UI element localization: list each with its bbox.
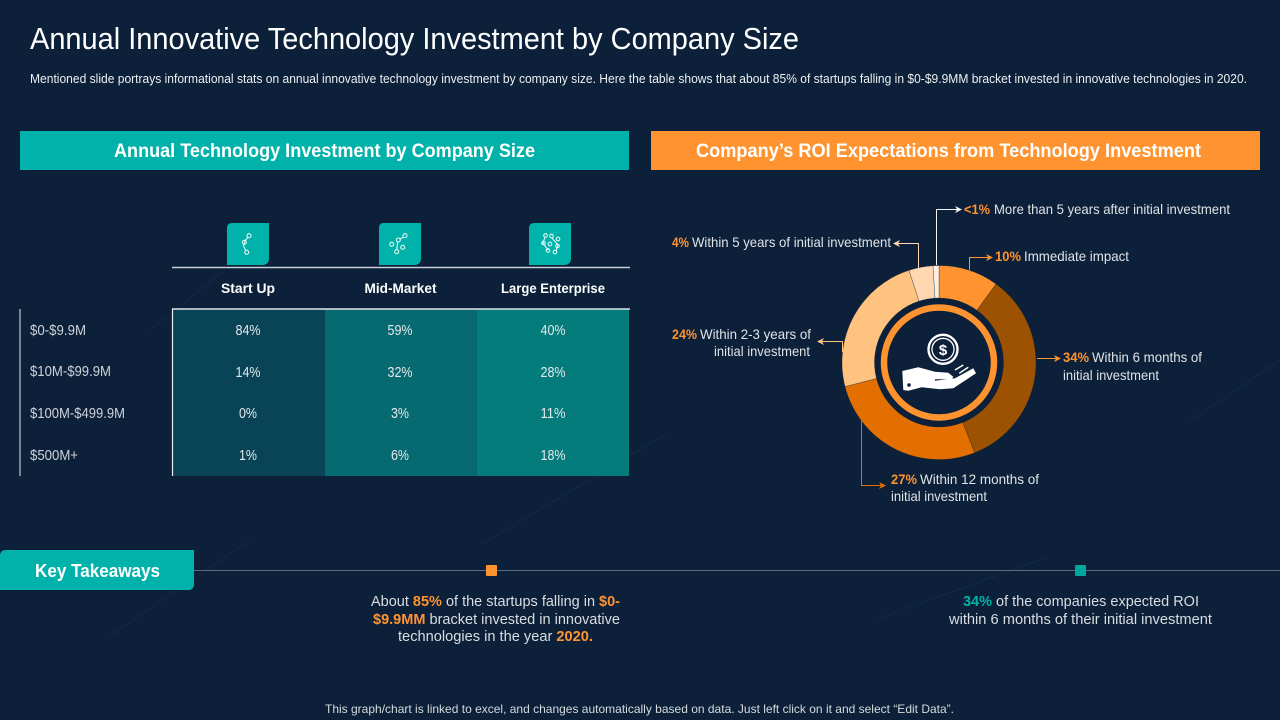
icon: hand holding coin [902,335,976,391]
table values: 0% [239,406,257,422]
panel: ROI heading [651,131,1260,170]
takeaway: startups [371,594,620,645]
label: 24 percent: 24% [672,326,697,342]
table values: 3% [391,406,409,422]
label: 27 percent [891,471,1039,504]
donut segments [842,266,1036,460]
panel: ROI heading: Company’s ROI Expectations from Technology Investment [696,141,1202,162]
icon: large enterprise [529,223,571,265]
column headers: Start Up [221,281,275,296]
arrow: 4 percent [893,240,918,268]
takeaway: ROI: 34% of the companies expected ROI [963,594,1199,610]
arrow: 10 percent [970,254,993,270]
label: 34 percent: initial investment [1063,367,1159,383]
label: 34 percent: 34% [1063,349,1090,365]
inner ring [884,308,994,418]
takeaway: ROI [948,594,1212,628]
label: 27 percent: 27% [891,471,918,487]
table values: 32% [388,365,413,381]
takeaway: startups: $9.9MM bracket invested in innovative [373,612,620,628]
row labels [30,322,125,464]
title: Annual Innovative Technology Investment by Company Size [30,21,799,56]
footer note: This graph/chart is linked to excel, and changes automatically based on data. Just left click on it and select “Edit Data”. [325,702,954,716]
takeaway: startups: About 85% of the startups falling in $0- [371,594,620,610]
panel: table heading [20,131,629,170]
takeaway: ROI: within 6 months of their initial investment [948,612,1212,628]
row labels: $100M-$499.9M [30,405,125,422]
takeaway: startups: technologies in the year 2020. [398,629,593,645]
table values: 28% [540,365,566,381]
label: 27 percent: Within 12 months of [920,471,1039,487]
table values: 18% [540,448,566,464]
label: 4 percent: 4% [672,234,689,250]
table values [236,323,566,464]
table values: 59% [388,323,413,339]
key takeaways badge [0,550,194,590]
label: 34 percent: Within 6 months of [1092,349,1202,365]
label: less than 1 percent: More than 5 years after initial investment [994,201,1230,217]
arrow: less than 1 percent [936,206,962,265]
table cell backgrounds [173,309,629,476]
panel: ROI donut chart [672,201,1230,504]
marker: teal [1075,565,1086,576]
key takeaways badge: Key Takeaways [35,561,160,581]
column headers: Mid-Market [364,281,437,296]
label: 27 percent: initial investment [891,488,987,504]
panel: key takeaways [0,550,1280,645]
panel: investment table [20,223,630,476]
label: 4 percent: Within 5 years of initial investment [692,234,891,250]
arrow: 24 percent [817,338,842,352]
panel: table heading: Annual Technology Investment by Company Size [114,141,535,162]
icon: start up [227,223,269,265]
subtitle description: Mentioned slide portrays informational stats on annual innovative technology investment by company size. Here the table shows that about 85% of startups falling in $0-$9.9MM bracket invested in innovative technologies in 2020. [30,72,1247,86]
row labels: $10M-$99.9M [30,363,111,380]
table values: 1% [239,448,257,464]
table values: 6% [391,448,409,464]
row labels: $500M+ [30,447,78,464]
marker: orange [486,565,497,576]
label: 10 percent: 10% [995,248,1022,264]
label: 10 percent: Immediate impact [1024,248,1129,264]
column headers: Large Enterprise [501,281,605,296]
label: less than 1 percent: <1% [964,201,990,217]
row labels: $0-$9.9M [30,322,86,339]
column headers [221,281,605,296]
label: 24 percent: initial investment [714,343,810,359]
label: 24 percent: Within 2-3 years of [700,326,811,342]
table values: 84% [236,323,261,339]
label: 24 percent [672,326,811,359]
table values: 11% [540,406,566,422]
table values: 14% [236,365,261,381]
table values: 40% [540,323,566,339]
icon: mid-market [379,223,421,265]
arrow: 27 percent [862,420,886,489]
arrow: 34 percent [1037,355,1061,362]
label: 34 percent [1063,349,1202,383]
icon: hand holding coin: $ [939,342,948,359]
